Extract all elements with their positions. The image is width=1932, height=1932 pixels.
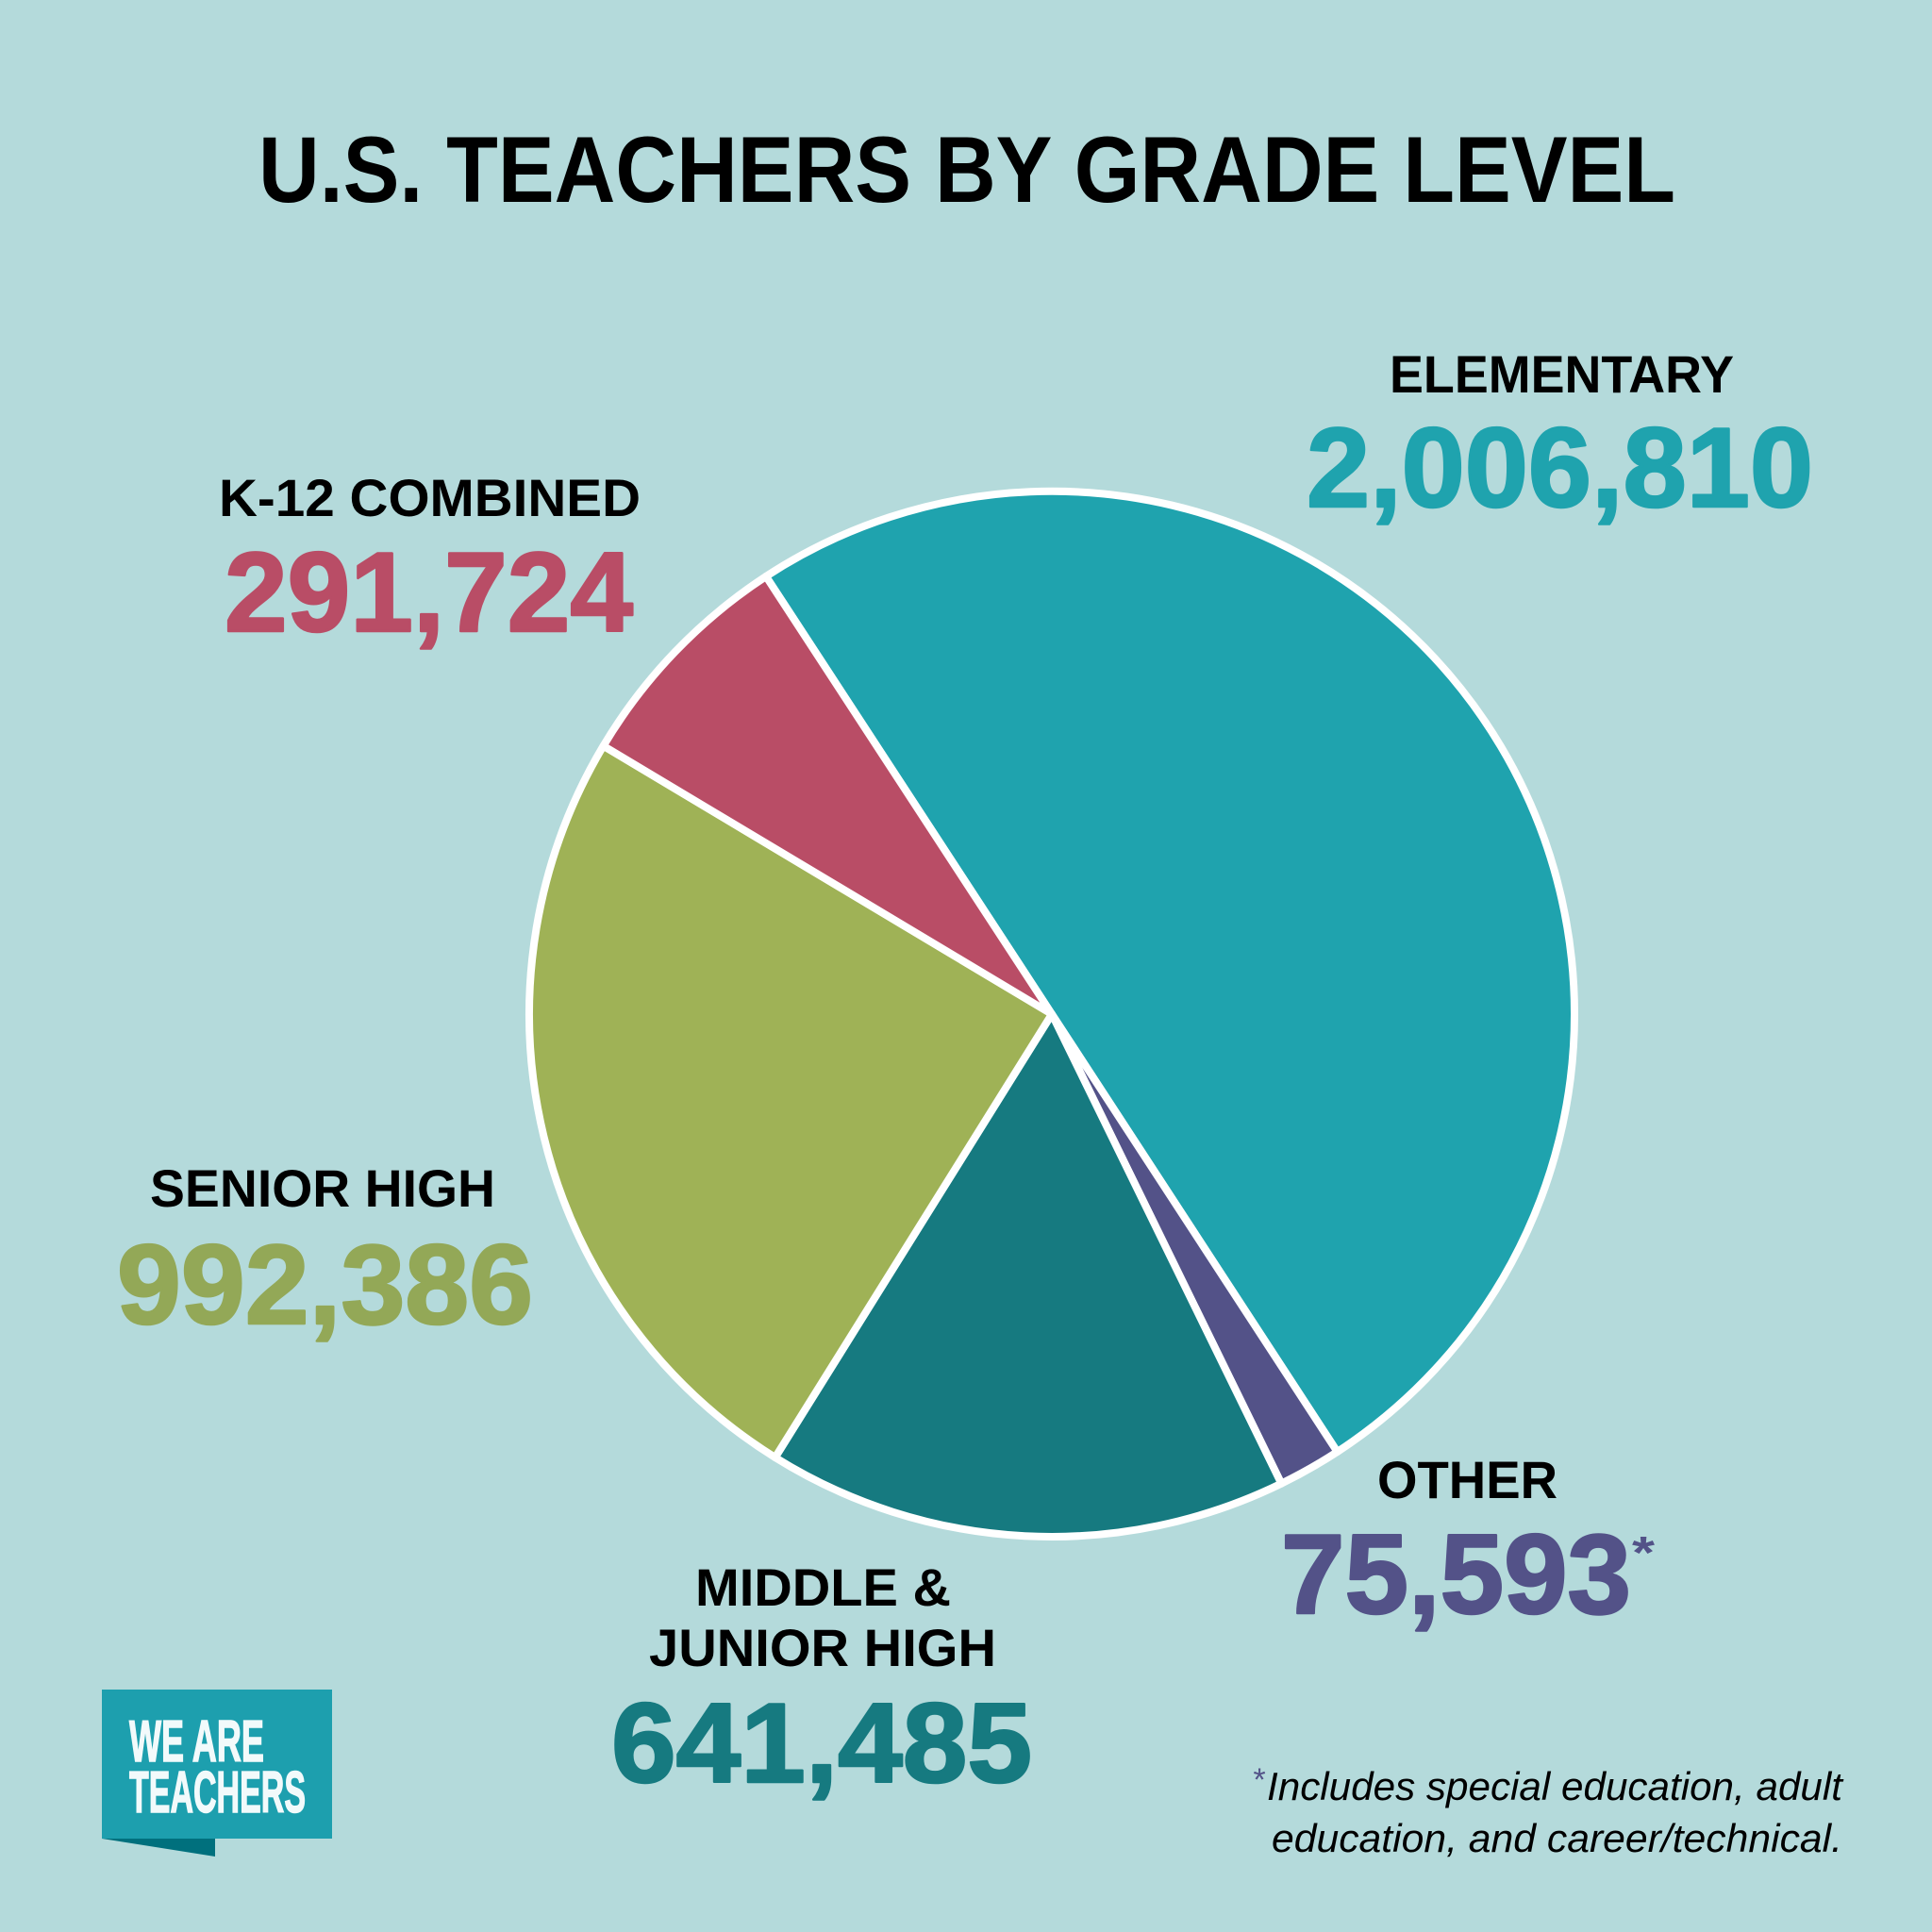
label: other: OTHER (1377, 1450, 1557, 1509)
footnote: Includes special education, adult (1267, 1764, 1844, 1808)
wedge: middle and junior high (775, 1014, 1281, 1537)
logo: we are teachers: WE ARE (129, 1709, 264, 1774)
label: other: * (1632, 1528, 1655, 1578)
pie chart (529, 491, 1574, 1537)
label: other (1281, 1450, 1655, 1638)
label: elementary: 2,006,810 (1307, 405, 1813, 531)
label: senior high: 992,386 (117, 1222, 533, 1348)
footnote: education, and career/technical. (1272, 1816, 1842, 1860)
logo: we are teachers (102, 1690, 332, 1857)
footnote: * (1252, 1762, 1266, 1798)
label: elementary: ELEMENTARY (1390, 344, 1734, 404)
label: elementary (1307, 344, 1813, 531)
wedge: senior high (529, 746, 1052, 1457)
footnote (1252, 1762, 1844, 1860)
label: k-12 combined: K-12 COMBINED (219, 468, 641, 527)
title: U.S. TEACHERS BY GRADE LEVEL (258, 117, 1675, 222)
wedge: elementary (766, 491, 1574, 1452)
label: middle and junior high (611, 1557, 1032, 1807)
logo: we are teachers: TEACHERS (129, 1760, 306, 1825)
wedge: k-12 combined (604, 576, 1052, 1014)
label: senior high: SENIOR HIGH (150, 1158, 495, 1218)
label: k-12 combined (219, 468, 641, 656)
label: middle and junior high: 641,485 (611, 1680, 1032, 1807)
label: middle and junior high: MIDDLE & (695, 1557, 951, 1617)
label: senior high (117, 1158, 533, 1348)
label: middle and junior high: JUNIOR HIGH (649, 1618, 996, 1677)
label: other: 75,593 (1281, 1511, 1631, 1638)
label: k-12 combined: 291,724 (225, 529, 633, 656)
wedge: other (1052, 1014, 1338, 1484)
